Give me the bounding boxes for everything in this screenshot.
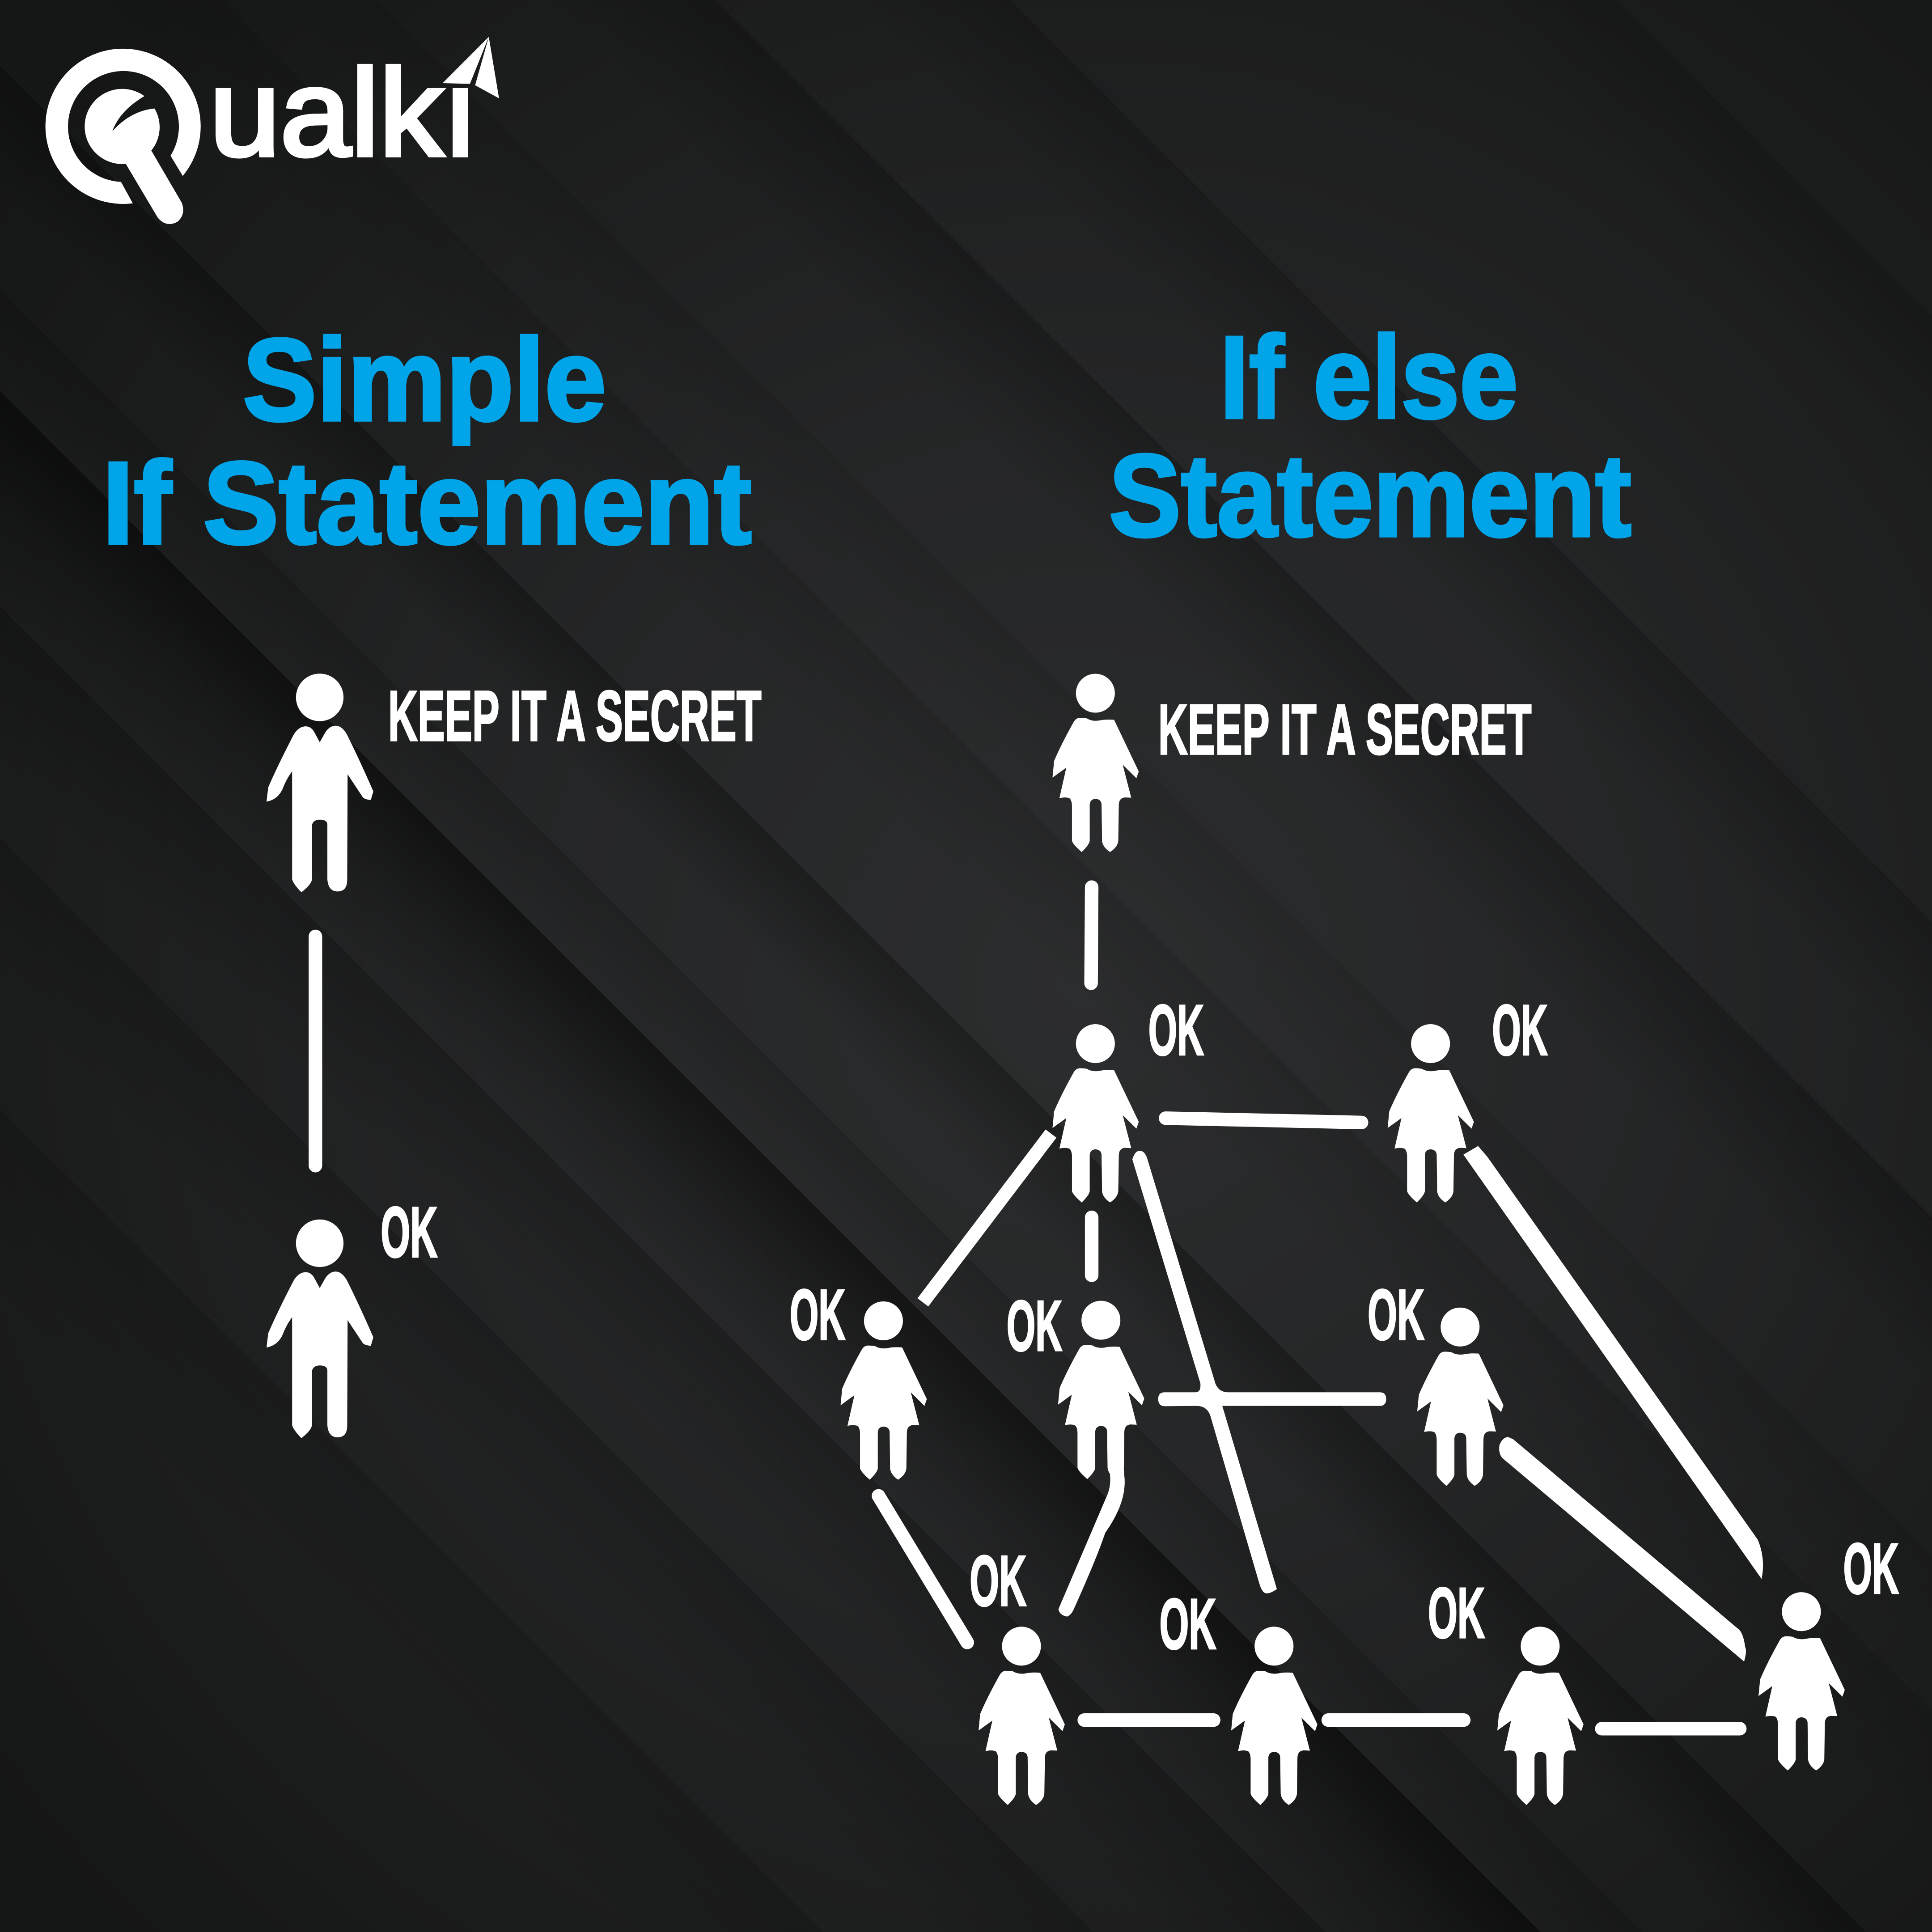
icon: woman row 3 right xyxy=(1417,1308,1504,1486)
label: ok bottom 3: OK xyxy=(1428,1573,1485,1653)
icon: woman bottom 2 xyxy=(1231,1627,1318,1805)
connector lines xyxy=(878,1118,1763,1729)
label: ok row 2 left: OK xyxy=(1148,990,1204,1070)
icon: woman bottom 1 xyxy=(979,1627,1065,1805)
heading: If else Statement xyxy=(1109,312,1631,561)
icon: man bottom xyxy=(267,1220,373,1438)
label: ok row 3 right: OK xyxy=(1368,1275,1424,1355)
icon: man top xyxy=(267,674,373,892)
label: keep it a secret: KEEP IT A SECRET xyxy=(388,676,762,756)
label: ok row 3 left: OK xyxy=(790,1275,845,1355)
label: ok row 3 center: OK xyxy=(1007,1286,1062,1366)
arrow: connector xyxy=(313,936,318,1165)
heading: If else Statement: If else xyxy=(1220,312,1518,443)
label: keep it a secret: KEEP IT A SECRET xyxy=(1158,689,1532,769)
label: ok: OK xyxy=(381,1192,437,1272)
icon: woman row 2 right xyxy=(1388,1024,1474,1203)
label: ok bottom 1: OK xyxy=(970,1541,1026,1621)
icon: magnifier ring xyxy=(46,49,201,204)
icon: woman row 2 left xyxy=(1052,1024,1139,1203)
heading: Simple If Statement: Simple xyxy=(243,314,606,446)
icon: woman row 3 center xyxy=(1058,1301,1144,1479)
logo wordmark: ualkı xyxy=(209,44,478,182)
panel: simple if statement xyxy=(102,314,762,1438)
icon: woman top xyxy=(1052,674,1139,852)
heading: Simple If Statement: If Statement xyxy=(102,438,752,568)
icon: woman row 3 left xyxy=(841,1301,927,1480)
label: ok row 2 right: OK xyxy=(1492,990,1547,1070)
icon: woman bottom 3 xyxy=(1497,1627,1584,1805)
icon: woman bottom 4 xyxy=(1758,1592,1845,1771)
heading: Simple If Statement xyxy=(102,314,752,568)
label: ok bottom 2: OK xyxy=(1160,1584,1216,1664)
icon: paper plane xyxy=(443,37,499,98)
panel: if else statement xyxy=(790,312,1899,1805)
heading: If else Statement: Statement xyxy=(1109,430,1631,561)
icon: magnifier lens and handle xyxy=(85,89,183,224)
logo: Qualki xyxy=(46,37,499,224)
connector: top to second xyxy=(1091,887,1092,983)
